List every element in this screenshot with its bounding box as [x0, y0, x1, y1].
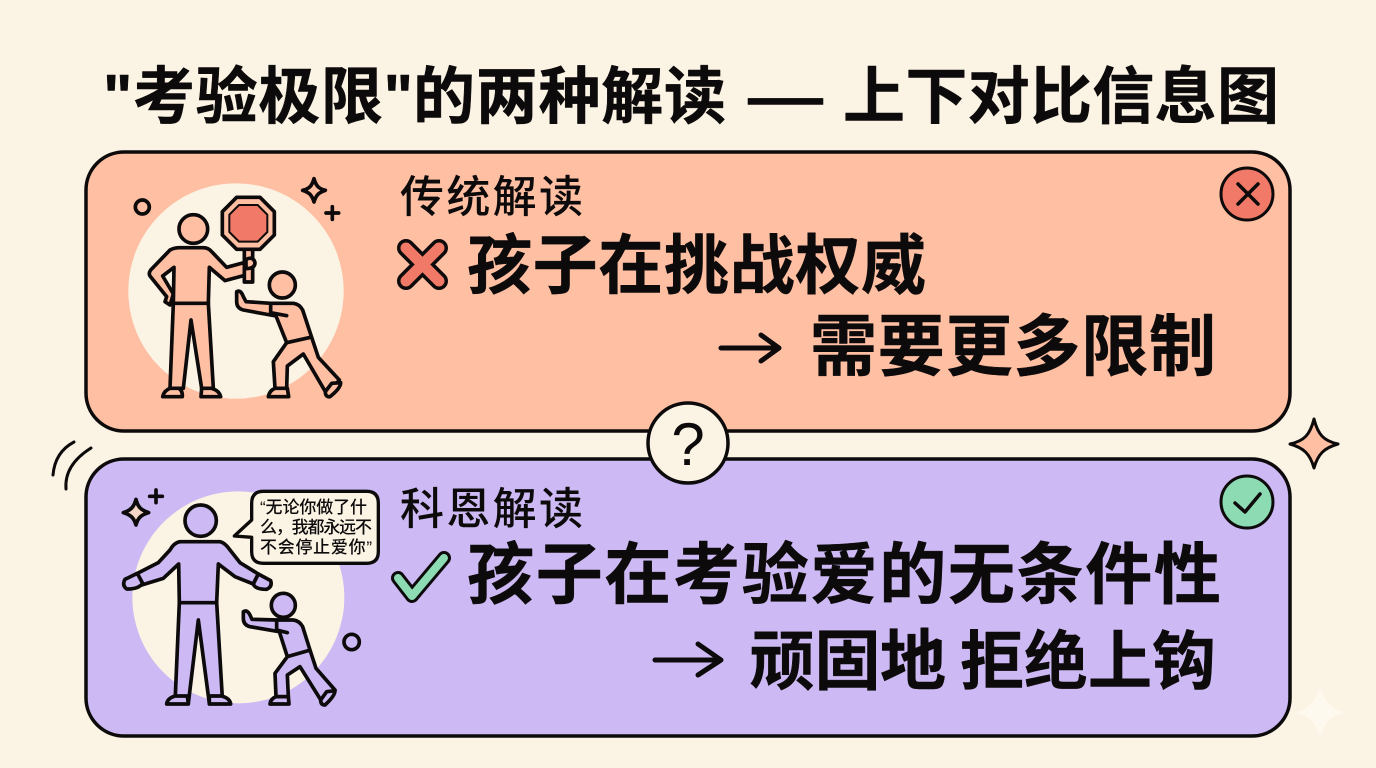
illustration: adult with open arms and pushing child: [123, 490, 378, 705]
arrow: traditional: [721, 335, 779, 361]
decoration: peach sparkle: [1290, 419, 1338, 468]
illustration: adult with stop sign and pushing child: [128, 179, 344, 399]
text: child tests unconditional love: 孩子在考验爱的无条件性: [467, 538, 1221, 613]
title: "考验极限": [103, 63, 413, 132]
icon: large check: [398, 558, 444, 596]
icon: large cross: [406, 248, 439, 281]
title: 的两种解读: [413, 63, 726, 132]
text: stubbornly refuse the hook: 拒绝上钩: [960, 626, 1216, 698]
heading: Kohn: 科恩解读: [400, 485, 583, 534]
panel: traditional reading: [53, 152, 1344, 736]
title: —: [748, 63, 823, 132]
speech bubble text: 不会停止爱你”: [260, 538, 372, 557]
heading: traditional: 传统解读: [400, 173, 583, 222]
title: 上下对比信息图: [843, 63, 1279, 132]
text: stubbornly refuse the hook: [749, 624, 1216, 698]
text: child challenges authority: 孩子在挑战权威: [467, 229, 926, 302]
text: needs more limits: 需要更多限制: [810, 310, 1216, 385]
decoration: faint sparkle: [1296, 688, 1344, 736]
speech bubble text: [260, 498, 372, 557]
speech bubble text: “无论你做了什: [260, 498, 367, 517]
speech bubble text: 么，我都永远不: [260, 518, 372, 537]
title: [103, 63, 1279, 132]
text: stubbornly refuse the hook: 顽固地: [749, 624, 946, 698]
panel: Kohn reading: [86, 459, 1290, 736]
connector: question mark: ?: [671, 411, 705, 478]
icon: cross badge: [1221, 168, 1273, 220]
decoration: motion arcs: [53, 442, 91, 489]
icon: check badge: [1221, 476, 1273, 528]
connector: question mark: [648, 403, 728, 483]
arrow: Kohn: [655, 644, 721, 675]
